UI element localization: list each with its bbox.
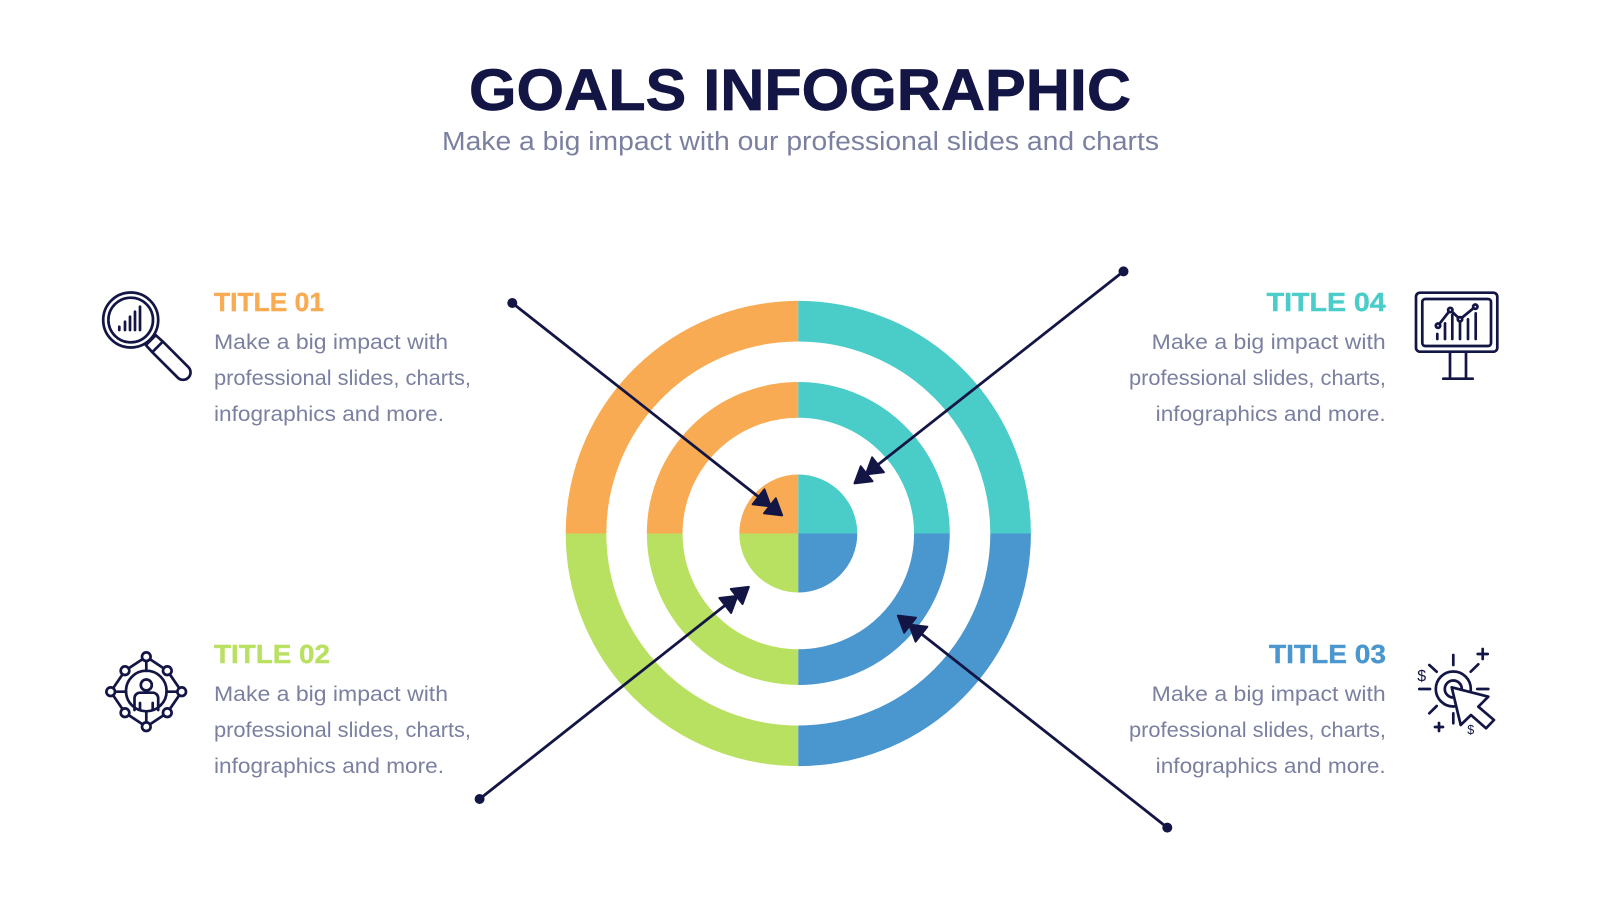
body 04: infographics and more. xyxy=(1156,402,1386,426)
centre disc xyxy=(739,474,857,592)
arrow: bottom left to centre xyxy=(475,579,755,804)
body 01: infographics and more. xyxy=(214,402,444,426)
body 03 xyxy=(1129,682,1386,778)
icon: click cursor: $ xyxy=(1467,723,1474,737)
icon: magnifying glass xyxy=(103,292,194,383)
arrow: bottom right to centre xyxy=(892,608,1172,833)
icon: click cursor xyxy=(1417,649,1494,737)
middle ring xyxy=(665,400,932,667)
arrow: top left to centre xyxy=(507,298,788,523)
body 02: Make a big impact with xyxy=(214,682,448,706)
panel: title 03 xyxy=(1129,639,1494,778)
heading 01: TITLE 01 xyxy=(214,287,324,317)
body 04: professional slides, charts, xyxy=(1129,366,1386,390)
body 03: Make a big impact with xyxy=(1152,682,1386,706)
icon: network person xyxy=(106,652,186,731)
body 01 xyxy=(214,330,471,426)
body 01: Make a big impact with xyxy=(214,330,448,354)
icon: monitor chart xyxy=(1416,293,1497,379)
icon: click cursor: $ xyxy=(1417,668,1426,685)
body 01: professional slides, charts, xyxy=(214,366,471,390)
subtitle: Make a big impact with our professional slides and charts xyxy=(442,128,1159,156)
heading 03: TITLE 03 xyxy=(1269,639,1386,669)
body 02 xyxy=(214,682,471,778)
body 02: infographics and more. xyxy=(214,754,444,778)
body 03: infographics and more. xyxy=(1156,754,1386,778)
heading 04: TITLE 04 xyxy=(1267,287,1386,317)
body 03: professional slides, charts, xyxy=(1129,718,1386,742)
title: GOALS INFOGRAPHIC xyxy=(469,58,1131,123)
body 04 xyxy=(1129,330,1386,426)
panel: title 04 xyxy=(1129,287,1497,426)
body 02: professional slides, charts, xyxy=(214,718,471,742)
arrow: top right to centre xyxy=(849,266,1128,491)
concentric target chart xyxy=(586,321,1011,746)
body 04: Make a big impact with xyxy=(1152,330,1386,354)
panel: title 02 xyxy=(106,639,471,778)
panel: title 01 xyxy=(103,287,471,426)
heading 02: TITLE 02 xyxy=(214,639,330,669)
outer ring xyxy=(586,321,1011,746)
